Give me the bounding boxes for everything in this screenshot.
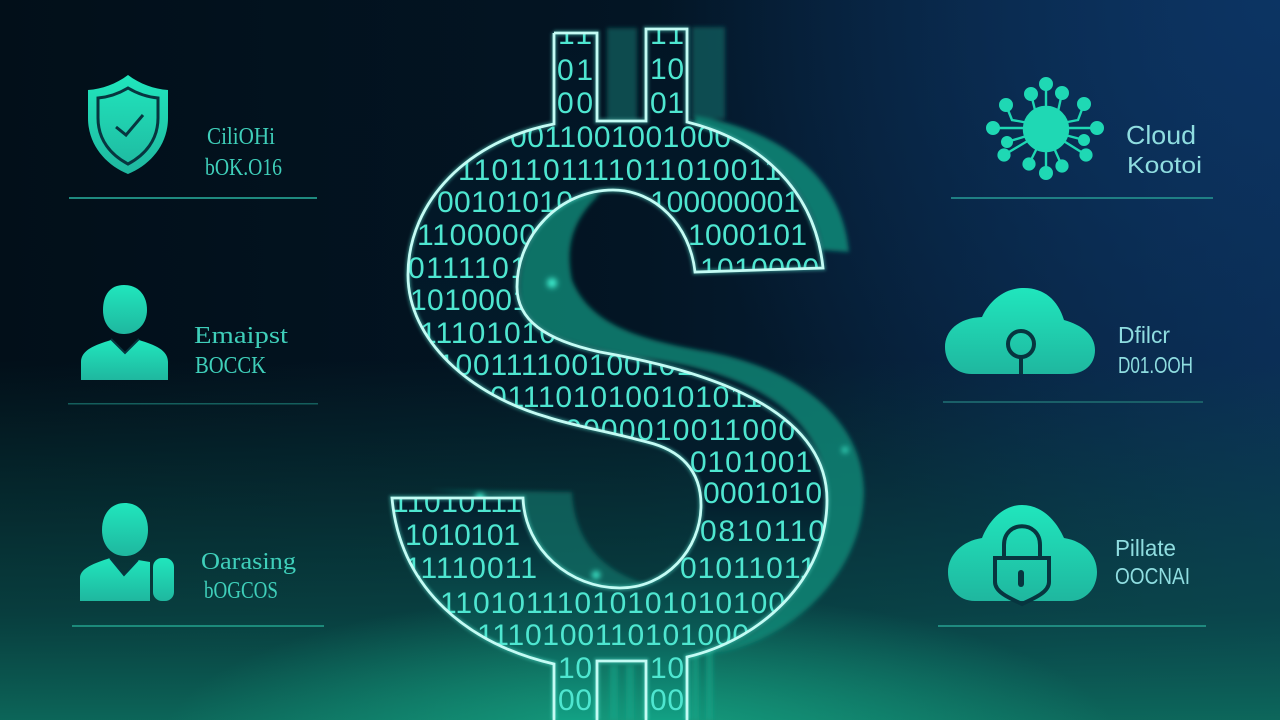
label bbox=[194, 323, 288, 379]
label bbox=[205, 124, 282, 181]
item: cloud with lock bbox=[948, 505, 1190, 604]
binary digits: 01011011 bbox=[680, 552, 816, 585]
binary digits: 11101010 bbox=[420, 317, 556, 350]
binary digits: 11 bbox=[650, 18, 684, 51]
icon: person bbox=[81, 285, 168, 380]
binary digits: 10 bbox=[558, 652, 592, 685]
dollar sign bbox=[392, 18, 827, 720]
item: shield bbox=[88, 75, 282, 181]
binary digits: 00 bbox=[558, 684, 592, 717]
ghost top stubs bbox=[607, 27, 725, 120]
binary digits: 01 bbox=[650, 87, 684, 120]
icon: shield with check bbox=[88, 75, 168, 174]
icon: person with arm bbox=[80, 503, 174, 601]
label: Emaipst bbox=[194, 323, 288, 349]
label: CiliOHi bbox=[207, 124, 275, 150]
glowing outline bbox=[392, 29, 827, 720]
item: person bbox=[81, 285, 288, 380]
label: OOCNAI bbox=[1115, 563, 1190, 589]
label: Oarasing bbox=[201, 549, 296, 575]
item: cloud bbox=[945, 288, 1193, 378]
icon: cloud with padlock bbox=[948, 505, 1097, 604]
icon: cloud with circle bbox=[945, 288, 1095, 374]
binary digits: 1010101 bbox=[405, 519, 520, 552]
item: network bbox=[987, 78, 1202, 179]
binary digits: 1101101111011010011 bbox=[458, 154, 781, 187]
label: BOCCK bbox=[195, 353, 267, 379]
binary digits: 00 bbox=[650, 684, 684, 717]
binary digits: 00 bbox=[557, 87, 593, 120]
binary digits: 10 bbox=[650, 53, 684, 86]
glow sparks bbox=[475, 278, 848, 579]
binary digits: 00101010 bbox=[437, 186, 573, 219]
icon: network node bbox=[987, 78, 1103, 179]
binary digits: 0111101 bbox=[408, 252, 527, 285]
label: Pillate bbox=[1115, 535, 1176, 561]
label: Dfilcr bbox=[1118, 322, 1170, 348]
ghost lower-left web bbox=[430, 490, 680, 595]
label: Kootoi bbox=[1127, 152, 1202, 178]
binary digits: 1010000 bbox=[700, 253, 819, 286]
label: bOK.O16 bbox=[205, 155, 282, 181]
binary digits: 11010111 bbox=[392, 486, 522, 519]
ghost top-right swoosh bbox=[695, 116, 849, 252]
ghost 3D extrusion of the dollar sign bbox=[430, 27, 864, 720]
item: person with badge bbox=[80, 503, 296, 604]
binary digits: 100111100100101 bbox=[438, 349, 693, 382]
ghost centre swoosh bbox=[519, 194, 864, 655]
binary digits: 0101001 bbox=[690, 446, 812, 479]
binary digits: 11110011 bbox=[405, 552, 537, 585]
binary digits: 0111010100101011 bbox=[490, 381, 762, 414]
label: Cloud bbox=[1126, 120, 1196, 150]
dollar interior bbox=[392, 29, 827, 720]
label: bOGCOS bbox=[204, 578, 278, 604]
label bbox=[1115, 535, 1190, 589]
label bbox=[201, 549, 296, 604]
binary digits: 11 bbox=[558, 18, 592, 51]
binary digits: 11010111010101010100 bbox=[440, 587, 785, 620]
binary digits: 1000101 bbox=[688, 219, 807, 252]
label bbox=[1126, 120, 1202, 178]
binary digits: 01 bbox=[557, 54, 593, 87]
binary digits: 0011001001000 bbox=[510, 121, 731, 154]
binary digits: 0001010 bbox=[703, 477, 822, 510]
binary digits: 1010001 bbox=[410, 284, 529, 317]
binary digits: 0000010011000 bbox=[565, 414, 795, 447]
ghost bottom stubs bbox=[610, 650, 713, 720]
binary digits bbox=[392, 18, 825, 717]
label bbox=[1118, 322, 1193, 378]
binary digits: 1100000 bbox=[417, 219, 536, 252]
binary digits: 0810110 bbox=[700, 515, 825, 548]
label: D01.OOH bbox=[1118, 352, 1193, 378]
binary digits: 100000001 bbox=[650, 186, 800, 219]
binary digits: 10 bbox=[650, 652, 684, 685]
binary digits: 1110100110101000 bbox=[477, 619, 749, 652]
